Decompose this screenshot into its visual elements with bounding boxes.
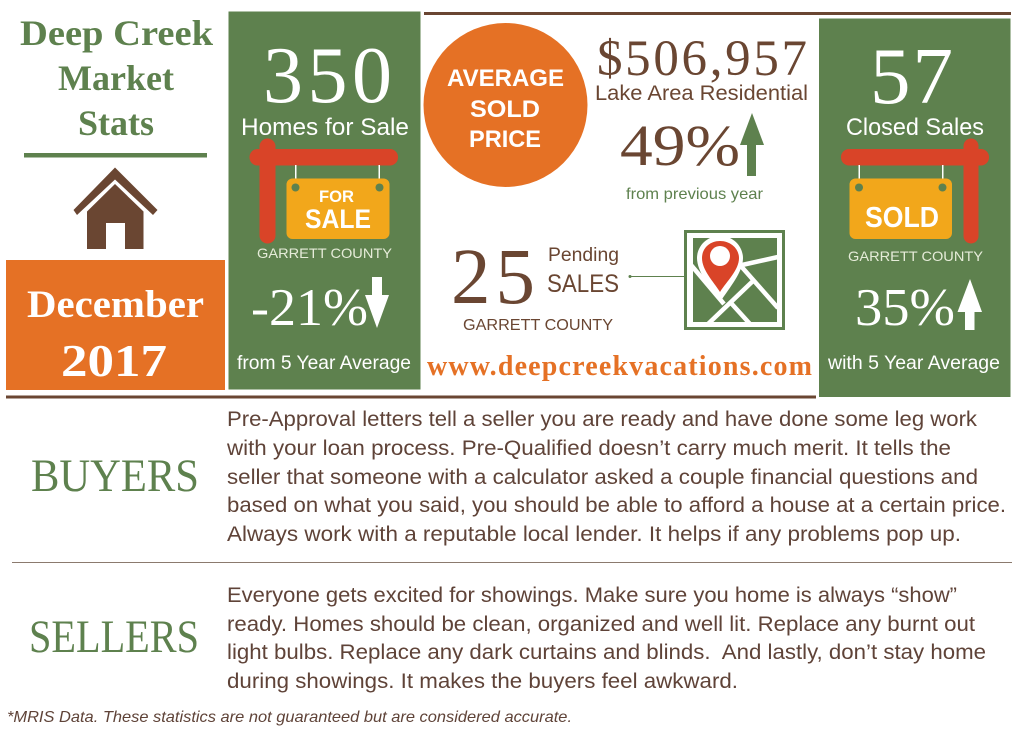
label: garrett county: GARRETT COUNTY: [257, 245, 393, 261]
icon: average sold price circle: [424, 23, 588, 187]
panel: date: [6, 260, 225, 390]
label: from previous year: from previous year: [626, 186, 764, 203]
text: buyers advice: seller that someone with a calculator asked a couple financial questions and: [227, 466, 978, 489]
label: lake area residential: Lake Area Residential: [595, 82, 808, 105]
icon: down arrow: [365, 277, 389, 328]
divider: [12, 562, 1012, 563]
text: buyers advice: Pre-Approval letters tell a seller you are ready and have done some leg work: [227, 408, 978, 431]
heading: buyers: BUYERS: [31, 450, 199, 502]
heading: sellers: SELLERS: [29, 611, 199, 663]
stat: 25 pending: 25: [451, 234, 535, 321]
stat: 25 pending: Pending: [548, 245, 619, 266]
text: sellers advice: light bulbs. Replace any dark curtains and blinds. And lastly, don’t stay home: [227, 641, 986, 664]
label: with 5 year average: with 5 Year Average: [827, 353, 1000, 374]
connector: [628, 275, 685, 278]
title: [20, 13, 213, 143]
icon: for sale sign: [250, 138, 398, 244]
stat: average price: $506,957: [597, 31, 807, 87]
text: sellers advice: [227, 584, 986, 693]
footnote: *MRIS Data. These statistics are not guaranteed but are considered accurate.: [7, 709, 572, 726]
stat: 49%: 49%: [620, 113, 740, 178]
text: buyers advice: [226, 408, 1006, 546]
number: 350: 350: [263, 32, 392, 120]
label: homes for sale: Homes for Sale: [241, 114, 409, 141]
title underline: [24, 153, 207, 158]
label: from 5 year average: from 5 Year Average: [237, 353, 411, 374]
title: Deep Creek: [20, 13, 213, 53]
website: www.deepcreekvacations.com: [427, 351, 812, 382]
number: 57: 57: [870, 31, 953, 121]
text: sellers advice: during showings. It makes the buyers feel awkward.: [227, 670, 738, 693]
text: sellers advice: ready. Homes should be clean, organized and well lit. Replace any burnt out: [227, 613, 975, 636]
stat: 25 pending: GARRETT COUNTY: [463, 317, 613, 334]
middle rule: [6, 396, 816, 398]
text: buyers advice: Always work with a reputable local lender. It helps if any problems pop up.: [227, 523, 961, 546]
text: sellers advice: Everyone gets excited for showings. Make sure you home is always “show”: [227, 584, 957, 607]
icon: for sale sign: SALE: [305, 204, 371, 234]
text: buyers advice: based on what you said, you should be able to afford a house at a certain price.: [227, 494, 1006, 517]
panel: date: December: [27, 283, 204, 326]
stat: -21%: -21%: [251, 279, 368, 337]
icon: up arrow green: [740, 113, 764, 176]
stat: 25 pending: SALES: [547, 270, 619, 298]
icon: up arrow: [958, 279, 982, 330]
label: garrett county: GARRETT COUNTY: [848, 248, 984, 264]
icon: sold sign: [841, 138, 989, 244]
top rule: [424, 12, 1011, 15]
panel: closed sales: [819, 18, 1010, 397]
icon: sold sign: SOLD: [865, 202, 939, 234]
icon: average sold price circle: SOLD: [470, 96, 540, 123]
panel: homes for sale: [228, 12, 420, 390]
title: Stats: [78, 103, 154, 143]
text: buyers advice: with your loan process. Pre-Qualified doesn’t carry much merit. It tells the: [226, 437, 951, 460]
label: closed sales: Closed Sales: [846, 114, 984, 141]
title: Market: [58, 58, 174, 98]
icon: house: [74, 168, 158, 249]
stat: 35%: 35%: [855, 279, 955, 337]
icon: for sale sign: FOR: [319, 188, 354, 206]
icon: average sold price circle: AVERAGE: [447, 65, 564, 92]
icon: average sold price circle: PRICE: [469, 126, 541, 153]
stat: 25 pending: [451, 234, 619, 334]
panel: date: 2017: [61, 335, 167, 386]
icon: map pin: [684, 230, 785, 330]
